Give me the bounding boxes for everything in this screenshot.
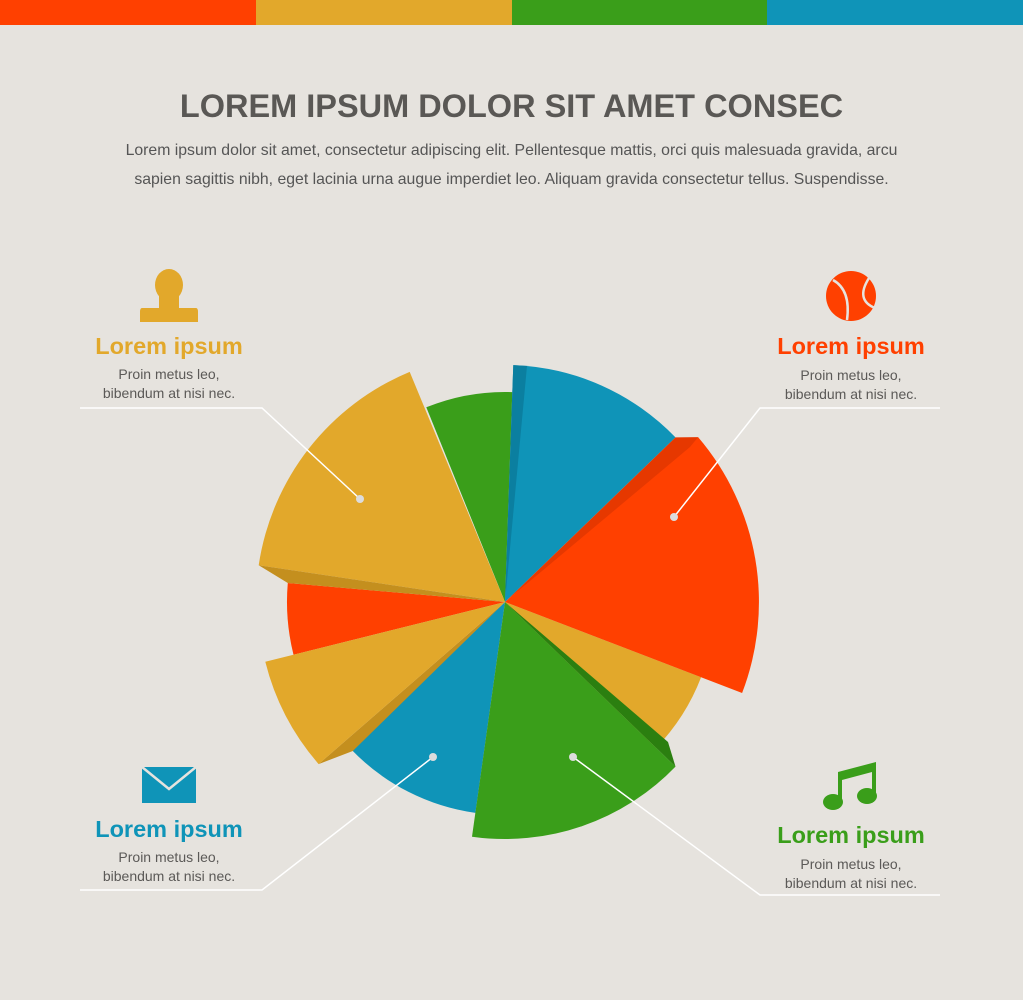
callout: top right: Proin metus leo, bbox=[800, 367, 902, 383]
callout: bottom left: bibendum at nisi nec. bbox=[103, 868, 235, 884]
icon: music note bbox=[823, 762, 877, 810]
callout: top left bbox=[95, 269, 243, 401]
icon: ball bbox=[826, 271, 876, 321]
callout: bottom left bbox=[95, 767, 243, 884]
callout: bottom right: bibendum at nisi nec. bbox=[785, 875, 917, 891]
title: LOREM IPSUM DOLOR SIT AMET CONSEC bbox=[180, 88, 843, 124]
intro text bbox=[126, 142, 897, 188]
callout: bottom left: Proin metus leo, bbox=[118, 849, 220, 865]
callout: top left: bibendum at nisi nec. bbox=[103, 385, 235, 401]
callout: top left: Proin metus leo, bbox=[118, 366, 220, 382]
intro text: Lorem ipsum dolor sit amet, consectetur adipiscing elit. Pellentesque mattis, orci quis malesuada gravida, arcu bbox=[126, 142, 897, 159]
callout: bottom right bbox=[777, 762, 925, 891]
callout: top right: bibendum at nisi nec. bbox=[785, 386, 917, 402]
callout: bottom right: Proin metus leo, bbox=[800, 856, 902, 872]
callout: top right: Lorem ipsum bbox=[777, 333, 925, 359]
intro text: sapien sagittis nibh, eget lacinia urna augue imperdiet leo. Aliquam gravida consectetur tellus. Suspendisse. bbox=[134, 171, 889, 188]
callout: top right bbox=[777, 271, 925, 402]
callout: bottom right: Lorem ipsum bbox=[777, 822, 925, 848]
callout: bottom left: Lorem ipsum bbox=[95, 816, 243, 842]
top color bar bbox=[0, 0, 1023, 25]
icon: person bbox=[140, 269, 198, 322]
icon: envelope bbox=[142, 767, 196, 803]
callout: top left: Lorem ipsum bbox=[95, 333, 243, 359]
